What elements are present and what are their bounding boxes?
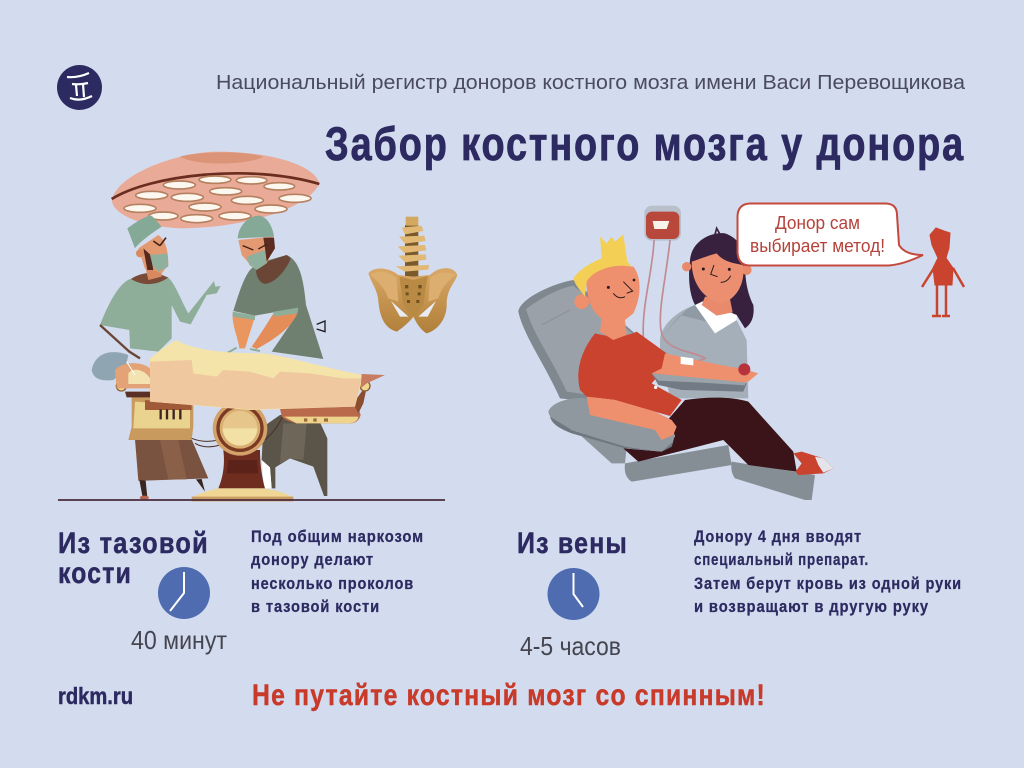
floor line: [58, 499, 445, 501]
description: в тазовой кости: [251, 597, 380, 616]
illustration: donor in chair with nurse: [518, 206, 833, 500]
icon: red character: [922, 228, 964, 316]
blood bag and tube: [643, 206, 705, 362]
duration: 4-5 часов: [520, 631, 621, 661]
duration: 40 минут: [131, 625, 227, 655]
icon: clock 40 minutes: [158, 567, 210, 619]
description: Донору 4 дня вводят: [694, 527, 862, 546]
illustration: spine and pelvis: [368, 217, 457, 333]
description: несколько проколов: [251, 574, 414, 593]
method heading: Из вены: [517, 527, 628, 560]
description: [251, 527, 424, 616]
method: from pelvic bone: [58, 527, 424, 655]
method: from vein: [517, 527, 962, 661]
speech bubble: [738, 204, 923, 266]
illustration: surgeons operating: [58, 152, 445, 501]
description: донору делают: [251, 550, 374, 569]
sheet over patient: [150, 340, 385, 410]
patient head: [92, 352, 152, 388]
description: Затем берут кровь из одной руки: [694, 574, 962, 593]
surgical lamp: [112, 152, 319, 228]
surgeon right: [227, 216, 325, 359]
method heading: Из тазовой: [58, 527, 209, 560]
method heading: [58, 527, 209, 590]
operating table and lower bodies: [116, 380, 370, 501]
description: Под общим наркозом: [251, 527, 424, 546]
header: organisation name: Национальный регистр доноров костного мозга имени Васи Перевощикова: [216, 72, 966, 94]
nurse: [660, 228, 754, 398]
donor body: [548, 332, 833, 500]
donor head: [573, 234, 640, 340]
surgeon left: [100, 216, 221, 358]
chair back: [518, 280, 637, 402]
description: и возвращают в другую руку: [694, 597, 929, 616]
method heading: кости: [58, 557, 132, 590]
description: специальный препарат.: [694, 550, 869, 569]
icon: registry logo: [57, 65, 102, 110]
description: [694, 527, 962, 616]
icon: clock 4-5 hours: [548, 568, 600, 620]
speech bubble: выбирает метод!: [750, 236, 885, 256]
speech bubble: Донор сам: [775, 213, 860, 233]
website: rdkm.ru: [58, 683, 133, 709]
warning note: Не путайте костный мозг со спинным!: [252, 679, 766, 712]
